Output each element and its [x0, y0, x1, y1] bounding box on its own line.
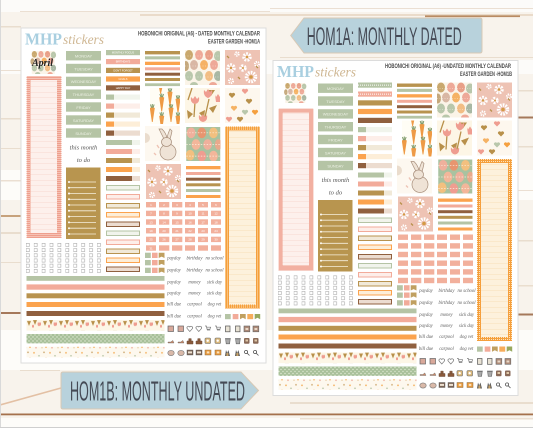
date grid: 10 [188, 212, 192, 216]
banner: HOM1B monthly undated [61, 372, 258, 409]
washi strips [26, 276, 164, 357]
pattern square: green eggs [186, 127, 222, 161]
date grid: 31 [149, 246, 153, 250]
pattern square: eggs [183, 50, 222, 88]
weekday labels: FRIDAY [328, 137, 343, 142]
date grid: 11 [201, 212, 205, 216]
date grid: 8 [163, 212, 165, 216]
script event words: payday [418, 324, 434, 329]
script: this month to do: to do [77, 157, 91, 164]
script event words: payday [166, 292, 182, 296]
date grid: 20 [162, 229, 166, 233]
script event words: no school [205, 256, 224, 262]
script event words: money [188, 292, 202, 296]
script: this month to do: this month [322, 177, 350, 184]
header bars with small labels: MONTHLY FOCUS [112, 51, 134, 55]
logo: MHP stickers: MHP [277, 62, 314, 81]
weekday labels: SUNDAY [327, 163, 344, 168]
weekday labels: MONDAY [327, 86, 344, 91]
icon rows [168, 326, 259, 356]
script event words: payday [166, 280, 182, 286]
logo: MHP stickers: stickers [315, 66, 357, 80]
script event words: birthday [187, 256, 203, 262]
date grid: 4 [189, 203, 191, 207]
date grid: 13 [149, 220, 153, 224]
egg banner [284, 83, 306, 105]
pattern square: daisies [477, 82, 512, 118]
script event words: sick day [207, 292, 223, 296]
script event words: bill due [167, 302, 181, 308]
script event words: dog vet [208, 302, 222, 308]
weekday labels: TUESDAY [326, 99, 345, 104]
logo: MHP stickers [25, 30, 105, 48]
date grid: 12 [214, 212, 218, 216]
script event words: payday [166, 256, 182, 262]
pattern square: daisies 2 [146, 164, 181, 199]
checkbox grid [278, 276, 357, 306]
date grid: 15 [175, 220, 179, 224]
date grid: 27 [175, 238, 179, 242]
pattern square: eggs [435, 82, 474, 120]
script event words: dog vet [208, 314, 222, 320]
script event words: money [440, 313, 454, 318]
date grid: 30 [214, 238, 218, 242]
script event words: sick day [459, 313, 475, 318]
weekday labels: FRIDAY [76, 105, 91, 110]
script event words: sick day [459, 324, 475, 329]
script event words: carpool [439, 335, 454, 340]
logo: MHP stickers: MHP [25, 30, 62, 48]
logo: MHP stickers [277, 62, 357, 81]
date grid: 3 [176, 203, 178, 207]
tab stickers [106, 94, 140, 136]
stripes set B [186, 166, 220, 198]
to-do list box [318, 200, 352, 272]
sheet title: EASTER GARDEN -HOM1A [208, 40, 260, 46]
weekday labels: THURSDAY [325, 124, 347, 130]
text: HOM1B: MONTHLY UNDATED [70, 376, 245, 406]
date grid: 22 [188, 229, 192, 233]
sheet paper [273, 60, 518, 396]
script event words: birthday [187, 268, 203, 274]
pattern square: daisies 2 [398, 196, 433, 232]
date grid: 17 [201, 220, 205, 224]
half boxes [358, 172, 392, 214]
date grid: 5 [202, 203, 204, 207]
weekday labels: MONDAY [75, 54, 92, 58]
pattern square: bunny [392, 158, 432, 194]
logo: MHP stickers: stickers [63, 33, 105, 48]
script event words: dog vet [460, 335, 474, 340]
weekday labels: WEDNESDAY [71, 79, 97, 84]
header bars with small labels: BIRTHDAYS [116, 60, 131, 64]
banner: HOM1A monthly dated [291, 18, 482, 53]
script event words: bill due [419, 347, 433, 352]
date grid: 16 [188, 220, 192, 224]
script event words: carpool [439, 347, 454, 352]
date grid: 29 [201, 238, 205, 242]
tall orange checked box [477, 159, 512, 341]
month header: April with eggs: April [31, 58, 53, 69]
date grid: 19 [149, 229, 153, 233]
script event words: payday [418, 289, 434, 294]
small flags [145, 253, 164, 273]
sheet paper [21, 28, 266, 363]
date grid: 2 [163, 203, 165, 207]
month header: April with eggs [30, 51, 56, 76]
date grid: 23 [201, 229, 205, 233]
script: this month to do: to do [329, 190, 343, 196]
script: this month to do [70, 144, 98, 164]
script event words: bill due [419, 335, 433, 340]
tab stickers [358, 127, 392, 168]
pattern square: hearts [225, 88, 260, 123]
date grid [146, 202, 221, 251]
script event words: carpool [187, 314, 202, 320]
script event words: no school [457, 289, 476, 294]
script event words: payday [418, 301, 434, 306]
script event words: birthday [439, 289, 455, 294]
pattern square: bunny [140, 126, 180, 161]
sticker sheet: HOM1B undated [273, 60, 518, 396]
header bars with small labels: HAPPY DAY [116, 86, 131, 90]
sheet title [138, 32, 260, 46]
script event words: birthday [439, 301, 455, 306]
to-do list box [66, 168, 100, 239]
date grid: 1 [150, 203, 152, 207]
pattern square: green eggs [438, 160, 474, 194]
half boxes [106, 140, 140, 181]
weekday labels: SUNDAY [75, 131, 92, 136]
header bars with small labels: GOALS [119, 77, 128, 81]
script event words: no school [457, 301, 476, 306]
date grid: 26 [162, 238, 166, 242]
date grid: 6 [215, 203, 217, 207]
pattern square: daisies [225, 50, 260, 85]
weekday labels: SATURDAY [325, 150, 346, 155]
stripes set B [438, 198, 472, 230]
header bars with small labels: DON'T FORGET [113, 68, 133, 72]
tall pink checked box [26, 76, 62, 238]
pattern square: carrots [402, 118, 432, 162]
script event words: payday [166, 268, 182, 274]
weekday labels: SATURDAY [73, 118, 94, 123]
flag row [477, 346, 512, 352]
date grid: 14 [162, 220, 166, 224]
date grid: 25 [149, 238, 153, 242]
pattern square: tulips [185, 88, 220, 123]
script event words: carpool [187, 302, 202, 308]
script event words [166, 256, 224, 320]
date grid: 9 [176, 212, 178, 216]
flag row [225, 314, 260, 319]
sheet title: HOBONICHI ORIGINAL (A6) - DATED MONTHLY CALENDAR [138, 32, 260, 38]
date grid: 7 [150, 212, 152, 216]
icon rows [420, 358, 511, 388]
plain header bars [358, 82, 392, 123]
stripes set A [145, 51, 180, 86]
header bars with small labels [106, 50, 140, 90]
outlined boxes [358, 218, 392, 304]
script event words: bill due [167, 314, 181, 320]
pattern square: carrots [150, 85, 180, 130]
script event words: money [440, 324, 454, 329]
pattern square: hearts [477, 120, 512, 156]
weekday labels [318, 84, 353, 170]
outlined boxes [106, 186, 140, 272]
weekday labels: TUESDAY [74, 66, 93, 71]
weekday labels: THURSDAY [73, 92, 95, 97]
sticker sheet: HOM1A dated [21, 28, 266, 363]
script event words [418, 289, 476, 352]
script event words: no school [205, 268, 224, 274]
script event words: payday [418, 313, 434, 318]
sheet title [385, 64, 512, 78]
script event words: dog vet [460, 347, 474, 352]
date grid: 24 [214, 229, 218, 233]
script event words: sick day [207, 280, 223, 286]
script: this month to do: this month [70, 144, 98, 152]
pattern square: tulips [437, 120, 472, 156]
date grid: 28 [188, 238, 192, 242]
tall pink checked box [278, 108, 314, 270]
weekday labels [66, 51, 101, 138]
blank date grid [398, 234, 473, 283]
weekday labels: WEDNESDAY [323, 112, 349, 117]
checkbox grid [26, 243, 105, 274]
tall orange checked box [225, 126, 260, 308]
washi strips [278, 308, 416, 390]
small flags [397, 285, 416, 306]
stripes set A [397, 84, 432, 119]
date grid: 18 [214, 220, 218, 224]
script: this month to do [322, 177, 350, 196]
script event words: money [188, 280, 202, 286]
date grid: 21 [175, 229, 179, 233]
